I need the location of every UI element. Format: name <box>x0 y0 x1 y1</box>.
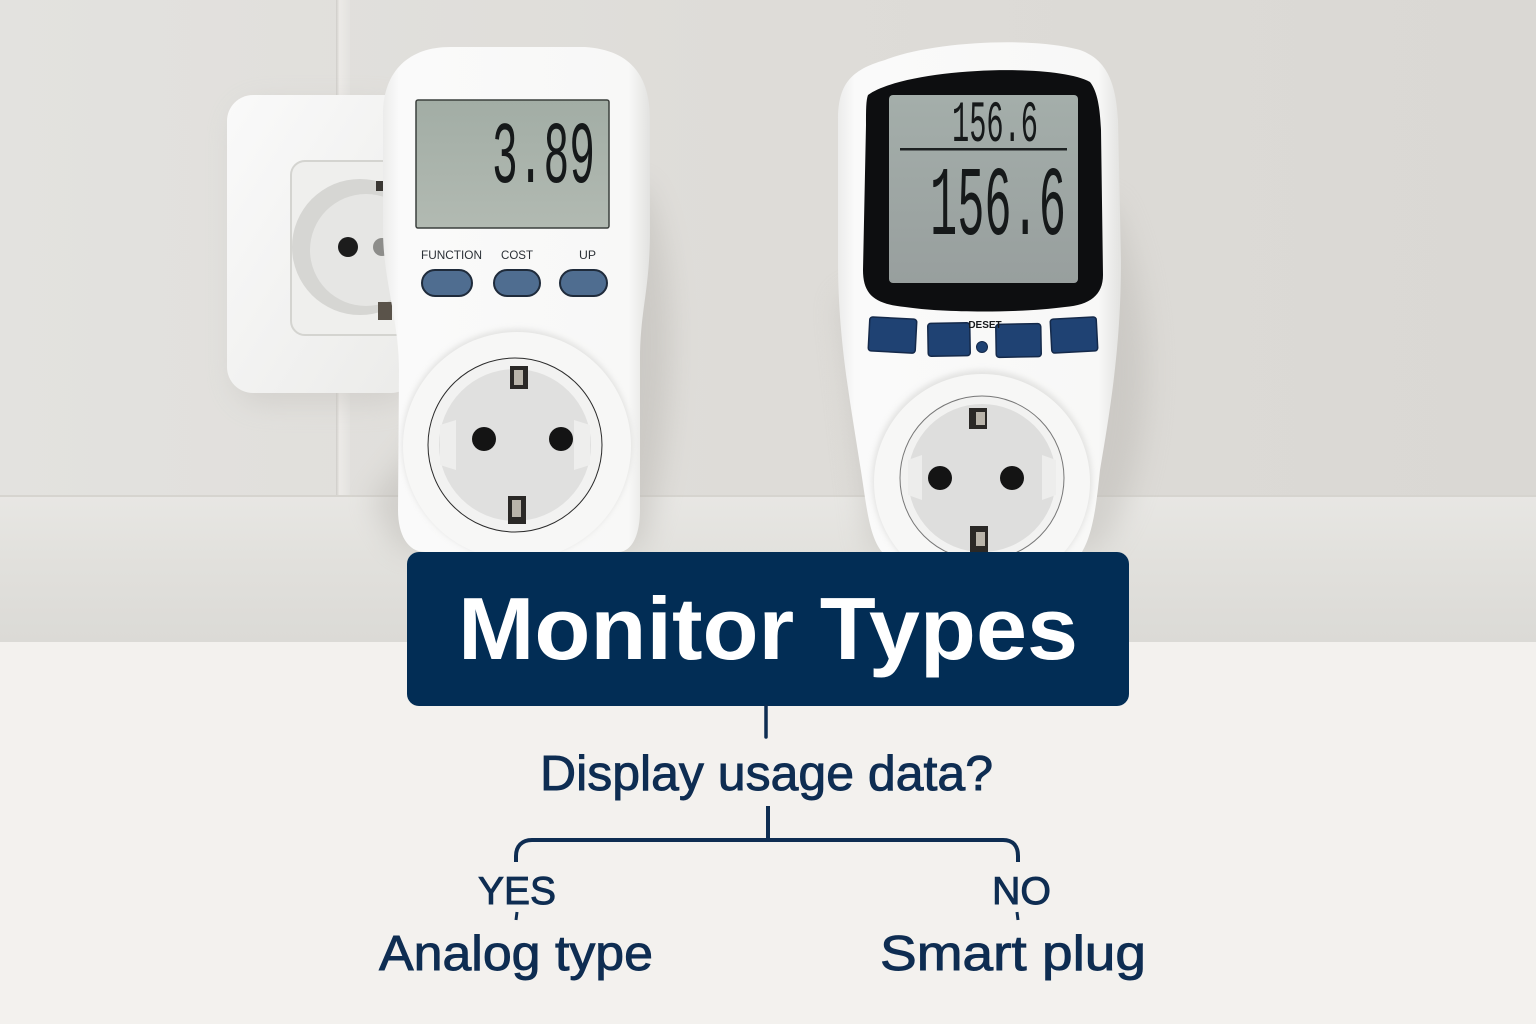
lcd screen: 3.89 <box>492 110 595 209</box>
lcd screen <box>416 100 609 228</box>
right meter: smart plug <box>838 42 1147 590</box>
button: cost: COST <box>501 248 534 262</box>
yes branch: YES <box>478 870 556 913</box>
left meter: analog type <box>370 47 670 560</box>
button: up: UP <box>579 248 596 262</box>
title banner: Monitor Types <box>458 579 1078 678</box>
no branch: Smart plug <box>880 927 1146 981</box>
wall outlet <box>227 95 428 403</box>
meter body <box>383 47 650 552</box>
bezel and lcd screen: 156.6 <box>930 153 1066 264</box>
socket <box>872 370 1092 590</box>
photo background: wall and counter <box>0 0 1536 642</box>
question text: Display usage data? <box>540 747 993 801</box>
button: function: FUNCTION <box>421 248 482 262</box>
decision branch connector <box>516 806 1018 862</box>
no branch: NO <box>992 870 1051 913</box>
lower page background <box>0 642 1536 1024</box>
function buttons <box>868 317 1098 357</box>
yes branch <box>379 870 653 981</box>
deset label: DESET <box>968 320 1002 331</box>
bezel and lcd screen <box>863 70 1103 312</box>
title banner <box>407 552 1129 706</box>
socket <box>402 329 632 560</box>
connector: banner to question <box>764 706 768 737</box>
button: up <box>560 248 607 296</box>
yes branch: Analog type <box>379 927 653 981</box>
bezel and lcd screen: 156.6 <box>952 94 1038 159</box>
button: cost <box>494 248 540 296</box>
no branch <box>880 870 1146 981</box>
meter body <box>838 42 1121 552</box>
button: function <box>421 248 482 296</box>
